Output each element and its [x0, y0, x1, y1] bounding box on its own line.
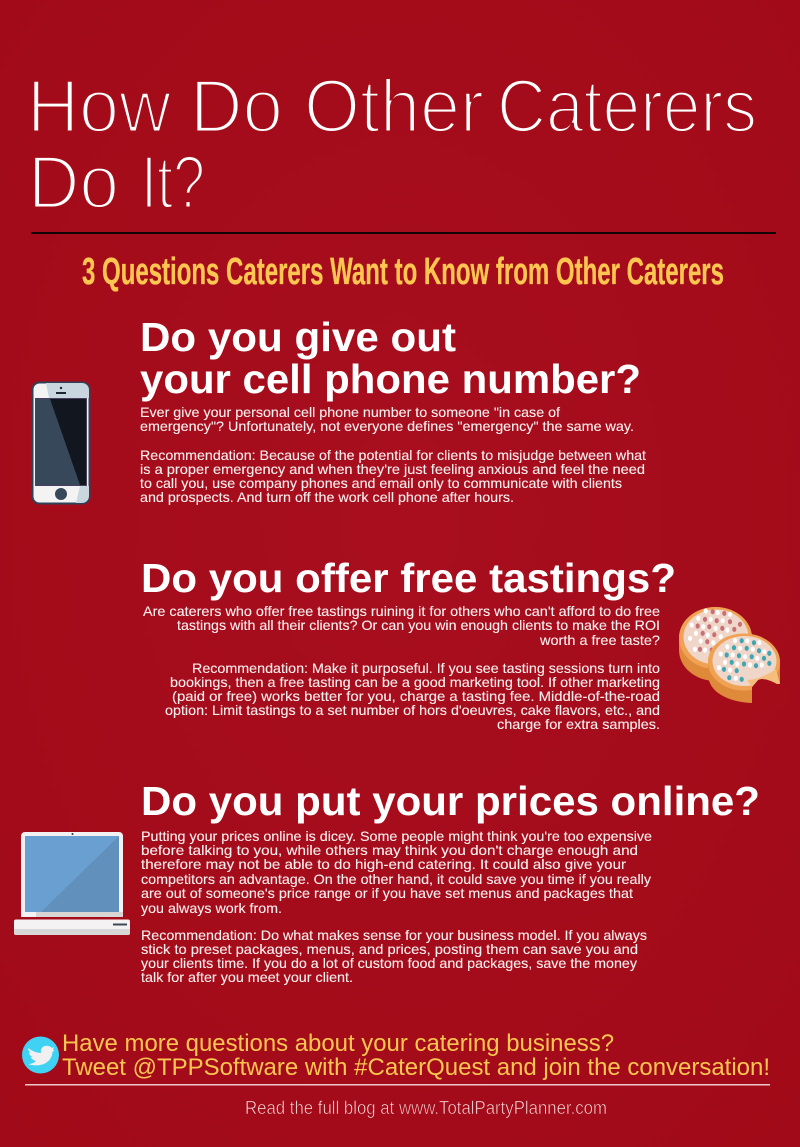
text block: prices: competitors an advantage. On the other hand, it could save you time if you really: [141, 872, 651, 887]
text block: tastings: bookings, then a free tasting can be a good marketing tool. If other marketing: [170, 675, 660, 690]
heading: cell phone: your cell phone number?: [140, 356, 641, 402]
icon: tarts: [679, 607, 790, 710]
callout: twitter: [22, 1030, 770, 1081]
text block: prices: you always work from.: [141, 901, 282, 916]
text block: cell phone: Recommendation: Because of the potential for clients to misjudge between what: [140, 448, 646, 463]
text block: prices: talk for after you meet your client.: [141, 970, 353, 985]
text block: prices: Recommendation: Do what makes sense for your business model. If you always: [141, 928, 647, 943]
callout text: [62, 1030, 770, 1081]
title: Other: [304, 64, 484, 148]
text block: cell phone: and prospects. And turn off the work cell phone after hours.: [140, 490, 514, 505]
title: It?: [141, 140, 205, 224]
icon: smartphone: [32, 382, 90, 504]
text block: cell phone: emergency"? Unfortunately, not everyone defines "emergency" the same way.: [140, 419, 634, 434]
heading: cell phone: [140, 314, 641, 402]
heading: tastings: Do you offer free tastings?: [141, 555, 676, 601]
text block: cell phone: is a proper emergency and when they're just feeling anxious and feel the need: [140, 462, 645, 477]
text block: prices: are out of someone's price range or if you have set menus and packages that: [141, 886, 633, 901]
text block: prices: stick to preset packages, menus, and prices, posting them can save you and: [141, 942, 638, 957]
icon: laptop: [14, 832, 130, 935]
callout text: Tweet @TPPSoftware with #CaterQuest and join the conversation!: [62, 1054, 770, 1081]
callout text: Have more questions about your catering business?: [62, 1030, 614, 1057]
title: Caterers: [497, 64, 757, 148]
icon: twitter bird: [22, 1036, 59, 1074]
heading: prices: Do you put your prices online?: [141, 778, 760, 824]
panel: free tastings question: [141, 555, 790, 732]
text block: tastings: [143, 604, 660, 732]
text block: tastings: tastings with all their clients? Or can you win enough clients to make the ROI: [177, 618, 660, 633]
text block: prices: your clients time. If you do a lot of custom food and packages, save the money: [141, 956, 637, 971]
text block: tastings: Are caterers who offer free tastings ruining it for others who can't afford to do free: [143, 604, 660, 619]
text block: cell phone: to call you, use company phones and email only to communicate with clients: [140, 476, 622, 491]
title: Do: [28, 140, 119, 224]
text block: tastings: charge for extra samples.: [497, 717, 660, 732]
text block: cell phone: Ever give your personal cell phone number to someone "in case of: [140, 405, 560, 420]
title: Do: [190, 64, 283, 148]
panel: prices online question: [14, 778, 760, 985]
text block: tastings: worth a free taste?: [539, 633, 660, 648]
panel: cell phone question: [32, 314, 646, 505]
text block: prices: Putting your prices online is dicey. Some people might think you're too expensive: [141, 829, 652, 844]
heading: cell phone: Do you give out: [140, 314, 456, 360]
footer link: Read the full blog at www.TotalPartyPlanner.com: [245, 1098, 607, 1118]
text block: cell phone: [140, 405, 646, 505]
text block: tastings: (paid or free) works better for you, charge a tasting fee. Middle-of-the-road: [172, 689, 660, 704]
text block: tastings: Recommendation: Make it purposeful. If you see tasting sessions turn into: [192, 661, 660, 676]
text block: prices: before talking to you, while others may think you don't charge enough and: [141, 843, 638, 858]
text block: prices: [141, 829, 652, 985]
text block: tastings: option: Limit tastings to a set number of hors d'oeuvres, cake flavors, etc., and: [165, 703, 660, 718]
text block: prices: therefore may not be able to do high-end catering. It could also give your: [141, 857, 627, 872]
title: How: [27, 64, 171, 148]
title: [27, 64, 757, 224]
